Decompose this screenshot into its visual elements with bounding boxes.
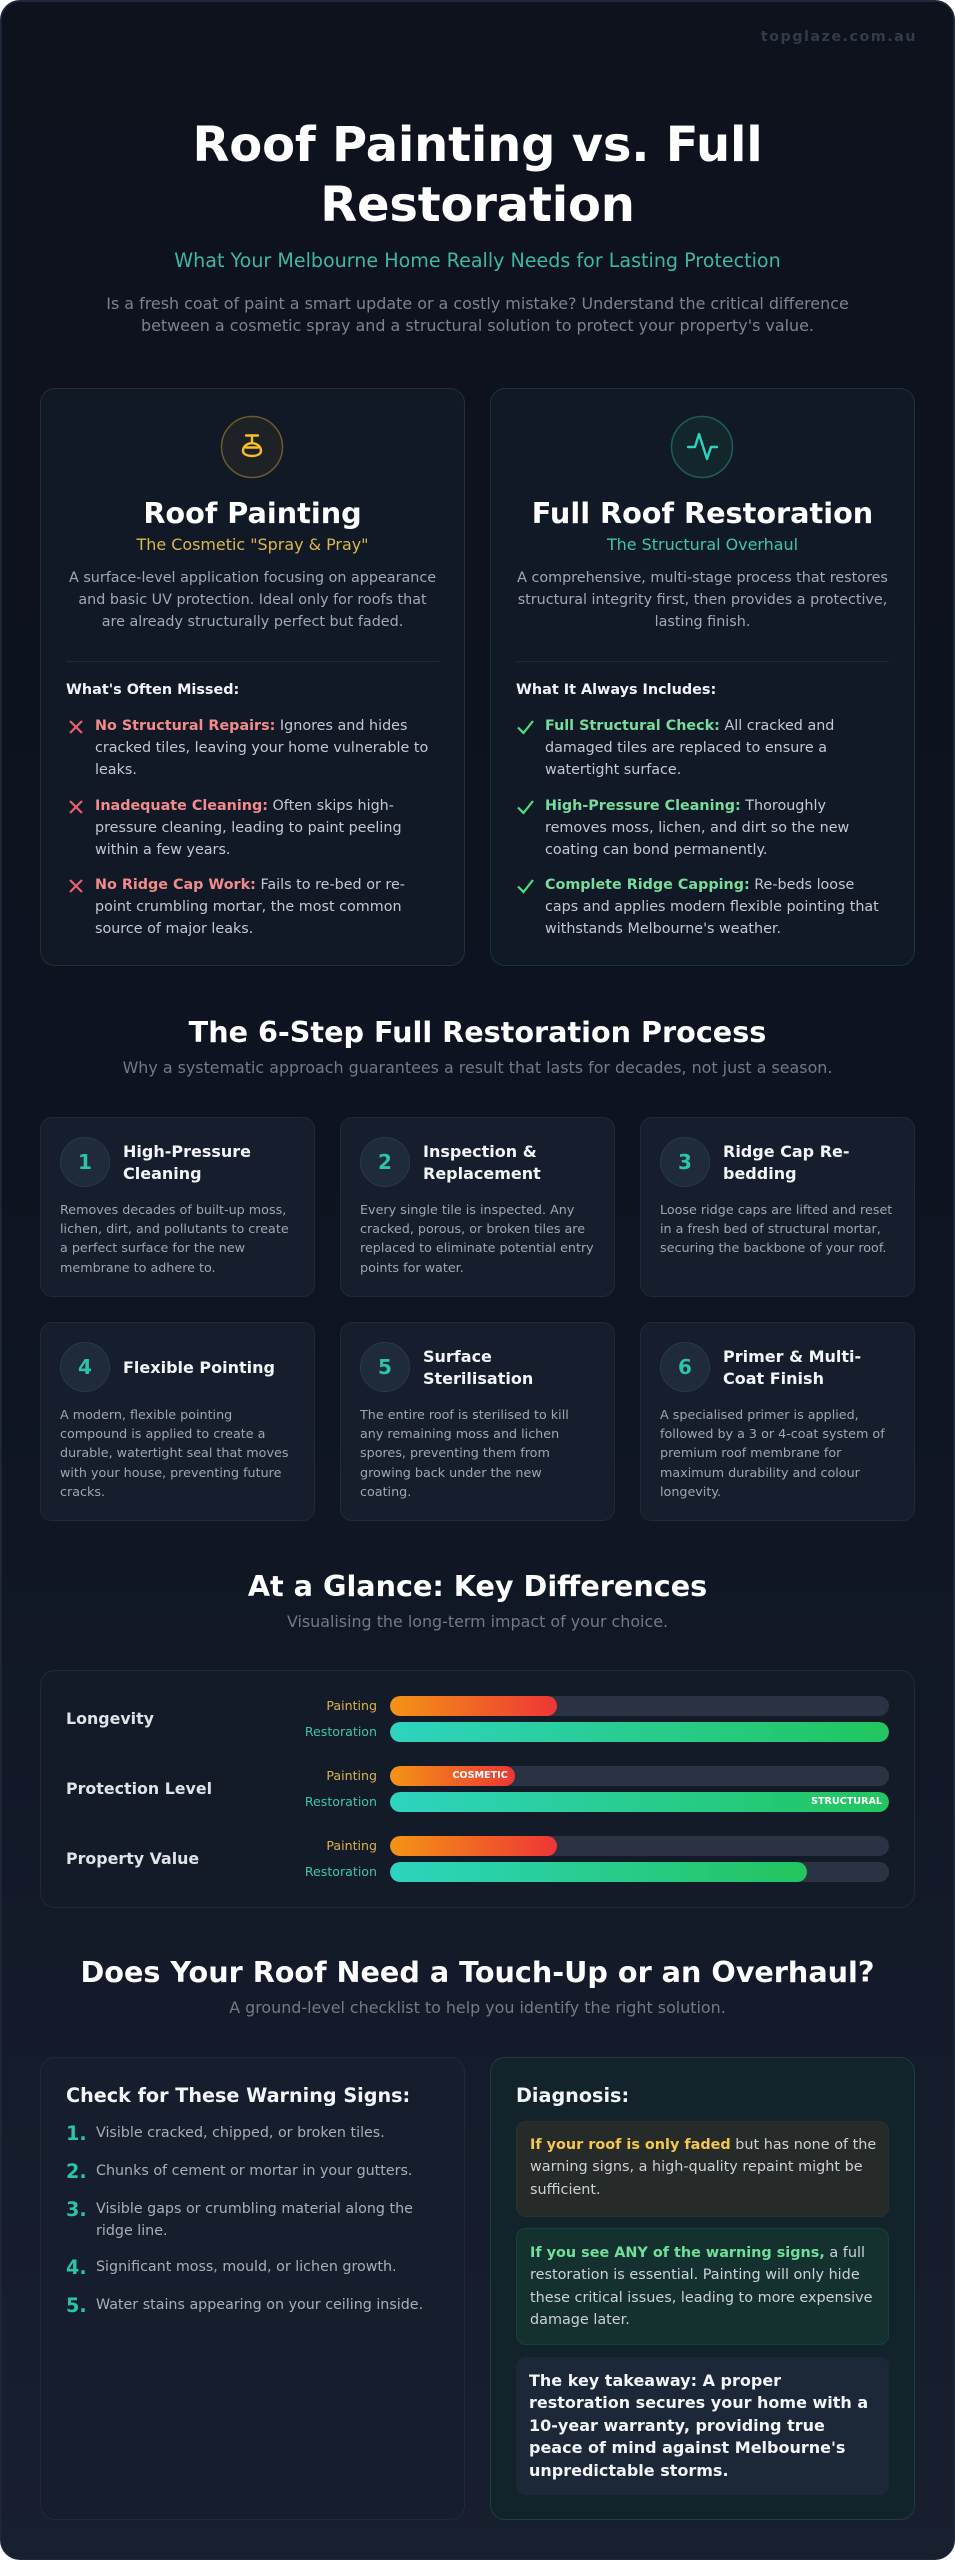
step title: High-Pressure — [123, 1142, 251, 1161]
tagline: The Cosmetic "Spray & Pray" — [136, 535, 368, 554]
description: structural integrity first, then provides a protective, — [518, 592, 887, 608]
panel: roof painting — [40, 388, 465, 966]
check icon — [517, 800, 534, 815]
description: are already structurally perfect but faded. — [102, 614, 403, 630]
heading: checklist: Does Your Roof Need a Touch-Up or an Overhaul? — [81, 1955, 874, 1989]
step 2 — [340, 1117, 615, 1297]
callout text: If you see ANY of the warning signs, a full — [530, 2245, 865, 2261]
heading: diagnosis: Diagnosis: — [516, 2084, 629, 2107]
step text: with your house, preventing future — [60, 1465, 281, 1480]
subheading: key differences: Visualising the long-term impact of your choice. — [287, 1612, 668, 1630]
item: high-pressure cleaning: removes moss, lichen, and dirt so the new — [545, 820, 849, 836]
label: restoration: Restoration — [305, 1794, 377, 1809]
step text: followed by a 3 or 4-coat system of — [660, 1426, 885, 1441]
step title: Cleaning — [123, 1164, 202, 1183]
item: no structural repairs — [95, 718, 428, 778]
item: complete ridge capping: caps and applies modern flexible pointing that — [545, 899, 879, 915]
step text — [60, 1202, 289, 1275]
step number: 2 — [378, 1150, 392, 1174]
step title — [423, 1347, 533, 1388]
warning numbers: 4. — [66, 2256, 87, 2279]
check icon — [517, 879, 534, 894]
step number: 1 — [78, 1150, 92, 1174]
heading: process: The 6-Step Full Restoration Process — [189, 1015, 766, 1049]
step title — [123, 1142, 251, 1183]
label: painting: Painting — [326, 1838, 377, 1853]
intro text: Is a fresh coat of paint a smart update or a costly mistake? Understand the critical difference — [106, 294, 849, 313]
warning 1: Visible cracked, chipped, or broken tiles. — [96, 2124, 385, 2140]
callout text: sufficient. — [530, 2182, 601, 2198]
step text: A modern, flexible pointing — [60, 1407, 232, 1422]
row: property value: Property Value — [66, 1849, 199, 1868]
step number: 4 — [78, 1355, 92, 1379]
step title: Surface — [423, 1347, 492, 1366]
item: no structural repairs: leaks. — [95, 762, 137, 778]
step title — [423, 1142, 541, 1183]
step title — [723, 1142, 850, 1183]
subtitle: What Your Melbourne Home Really Needs for Lasting Protection — [174, 249, 781, 272]
step text: cracked, porous, or broken tiles are — [360, 1221, 585, 1236]
bar: restoration protection: STRUCTURAL — [811, 1796, 882, 1807]
label: painting: Painting — [326, 1768, 377, 1783]
title: Roof Painting vs. Full — [193, 117, 762, 173]
heading: full roof restoration: Full Roof Restoration — [532, 496, 873, 530]
step title: Ridge Cap Re- — [723, 1142, 850, 1161]
step text — [360, 1407, 569, 1499]
step 6 — [640, 1322, 915, 1521]
step 3 — [640, 1117, 915, 1297]
step text: coating. — [360, 1484, 411, 1499]
step text: Loose ridge caps are lifted and reset — [660, 1202, 892, 1217]
warning 3 — [96, 2200, 413, 2239]
bar: painting protection: COSMETIC — [452, 1770, 508, 1781]
step title: bedding — [723, 1164, 797, 1183]
step text: growing back under the new — [360, 1465, 542, 1480]
item: no ridge cap work — [95, 877, 405, 937]
item: high-pressure cleaning: coating can bond permanently. — [545, 842, 768, 858]
step number: 6 — [678, 1355, 692, 1379]
step 4 — [40, 1322, 315, 1521]
bar: painting longevity — [390, 1696, 889, 1716]
step text — [660, 1202, 892, 1255]
list heading: What's Often Missed: — [66, 682, 239, 698]
label: painting: Painting — [326, 1698, 377, 1713]
item: no ridge cap work: No Ridge Cap Work: Fails to re-bed or re- — [95, 877, 405, 893]
item: complete ridge capping: withstands Melbourne's weather. — [545, 921, 781, 937]
step title: Coat Finish — [723, 1369, 824, 1388]
step text: cracks. — [60, 1484, 105, 1499]
heading: key differences: At a Glance: Key Differences — [248, 1569, 707, 1603]
bar: painting protection — [390, 1766, 889, 1786]
step number — [60, 1342, 110, 1392]
step text: any remaining moss and lichen — [360, 1426, 559, 1441]
step text: durable, watertight seal that moves — [60, 1445, 288, 1460]
step number — [660, 1342, 710, 1392]
item: no structural repairs: No Structural Repairs: Ignores and hides — [95, 718, 407, 734]
item: complete ridge capping — [545, 877, 879, 937]
warning numbers: 1. — [66, 2122, 87, 2145]
step text: longevity. — [660, 1484, 721, 1499]
warning 5: Water stains appearing on your ceiling inside. — [96, 2296, 423, 2312]
check icon — [517, 720, 534, 735]
item: full structural check: watertight surface. — [545, 762, 681, 778]
step text: premium roof membrane for — [660, 1445, 841, 1460]
item: no ridge cap work: source of major leaks. — [95, 921, 253, 937]
bar: restoration value — [390, 1862, 889, 1882]
cross icon — [69, 879, 83, 893]
cross icon — [69, 720, 83, 734]
callout text: warning signs, a high-quality repaint might be — [530, 2159, 863, 2175]
warning numbers: 3. — [66, 2198, 87, 2221]
step text: A specialised primer is applied, — [660, 1407, 859, 1422]
intro text: between a cosmetic spray and a structural solution to protect your property's value. — [141, 316, 814, 335]
warning numbers: 2. — [66, 2160, 87, 2183]
list heading: What It Always Includes: — [516, 682, 716, 698]
description: A surface-level application focusing on appearance — [69, 570, 436, 586]
warning 3: Visible gaps or crumbling material along the — [96, 2200, 413, 2216]
item: full structural check: Full Structural Check: All cracked and — [545, 718, 834, 734]
heading: warning signs: Check for These Warning Signs: — [66, 2084, 410, 2107]
description: A comprehensive, multi-stage process that restores — [517, 570, 888, 586]
step number — [60, 1137, 110, 1187]
icon: pulse — [670, 416, 734, 478]
step text: securing the backbone of your roof. — [660, 1240, 886, 1255]
callout text — [529, 2371, 868, 2480]
warning 4: Significant moss, mould, or lichen growth. — [96, 2258, 397, 2274]
row: protection level: Protection Level — [66, 1779, 212, 1798]
step text: points for water. — [360, 1260, 464, 1275]
step text — [360, 1202, 594, 1275]
subheading: checklist: A ground-level checklist to help you identify the right solution. — [229, 1998, 726, 2017]
description: lasting finish. — [655, 614, 750, 630]
step number: 5 — [378, 1355, 392, 1379]
step title: Flexible Pointing — [123, 1358, 275, 1377]
step text: Removes decades of built-up moss, — [60, 1202, 286, 1217]
step 5 — [340, 1322, 615, 1521]
step title: Replacement — [423, 1164, 541, 1183]
subheading: process: Why a systematic approach guarantees a result that lasts for decades, not just a season. — [123, 1058, 832, 1077]
item: full structural check: damaged tiles are replaced to ensure a — [545, 740, 827, 756]
step text: membrane to adhere to. — [60, 1260, 216, 1275]
description — [69, 570, 436, 630]
item: inadequate cleaning: pressure cleaning, leading to paint peeling — [95, 820, 402, 836]
title: Restoration — [320, 177, 635, 233]
label: restoration: Restoration — [305, 1724, 377, 1739]
callout text: The key takeaway: A proper — [529, 2371, 781, 2390]
callout text — [530, 2245, 873, 2328]
warning 2: Chunks of cement or mortar in your gutters. — [96, 2162, 412, 2178]
step text: in a fresh bed of structural mortar, — [660, 1221, 881, 1236]
bar chart panel — [40, 1670, 915, 1908]
step text: a perfect surface for the new — [60, 1240, 245, 1255]
step text — [60, 1407, 288, 1499]
item: full structural check — [545, 718, 834, 778]
step text: Every single tile is inspected. Any — [360, 1202, 574, 1217]
row: longevity: Longevity — [66, 1709, 154, 1728]
item: inadequate cleaning: Inadequate Cleaning: Often skips high- — [95, 798, 394, 814]
callout: warning signs seen — [516, 2228, 889, 2345]
step text — [660, 1407, 885, 1499]
step title — [723, 1347, 861, 1388]
cross icon — [69, 800, 83, 814]
step number — [360, 1342, 410, 1392]
callout text: these critical issues, leading to more expensive — [530, 2290, 873, 2306]
callout: key takeaway — [516, 2357, 889, 2495]
step text: lichen, dirt, and pollutants to create — [60, 1221, 289, 1236]
callout text: restoration is essential. Painting will only hide — [530, 2267, 860, 2283]
callout text: 10-year warranty, providing true — [529, 2416, 825, 2435]
step number — [360, 1137, 410, 1187]
item: complete ridge capping: Complete Ridge Capping: Re-beds loose — [545, 877, 854, 893]
step title: Primer & Multi- — [723, 1347, 861, 1366]
panel: full roof restoration — [490, 388, 915, 966]
item: inadequate cleaning — [95, 798, 402, 858]
callout text: peace of mind against Melbourne's — [529, 2438, 845, 2457]
bar: restoration protection — [390, 1792, 889, 1812]
callout text — [530, 2137, 876, 2198]
item: no structural repairs: cracked tiles, leaving your home vulnerable to — [95, 740, 428, 756]
warning 3: ridge line. — [96, 2223, 168, 2239]
step title: Inspection & — [423, 1142, 537, 1161]
step number — [660, 1137, 710, 1187]
callout text: damage later. — [530, 2312, 630, 2328]
description: and basic UV protection. Ideal only for roofs that — [78, 592, 427, 608]
panel: warning signs — [40, 2057, 465, 2520]
item: no ridge cap work: point crumbling mortar, the most common — [95, 899, 402, 915]
item: high-pressure cleaning — [545, 798, 849, 858]
warning numbers: 5. — [66, 2294, 87, 2317]
step number: 3 — [678, 1150, 692, 1174]
tagline: The Structural Overhaul — [607, 535, 798, 554]
step text: replaced to eliminate potential entry — [360, 1240, 594, 1255]
step 1 — [40, 1117, 315, 1297]
item: inadequate cleaning: within a few years. — [95, 842, 230, 858]
icon: paint — [220, 416, 284, 478]
step text: The entire roof is sterilised to kill — [360, 1407, 569, 1422]
bar: restoration longevity — [390, 1722, 889, 1742]
heading: roof painting: Roof Painting — [143, 496, 362, 530]
label: restoration: Restoration — [305, 1864, 377, 1879]
step text: compound is applied to create a — [60, 1426, 265, 1441]
callout text: restoration secures your home with a — [529, 2393, 868, 2412]
callout text: unpredictable storms. — [529, 2461, 729, 2480]
watermark: topglaze.com.au — [761, 29, 917, 45]
callout: faded — [516, 2121, 889, 2217]
callout text: If your roof is only faded but has none of the — [530, 2137, 876, 2153]
intro text — [106, 294, 849, 335]
title — [193, 117, 762, 233]
item: high-pressure cleaning: High-Pressure Cleaning: Thoroughly — [545, 798, 826, 814]
step title: Sterilisation — [423, 1369, 533, 1388]
description — [517, 570, 888, 630]
bar: painting value — [390, 1836, 889, 1856]
step text: spores, preventing them from — [360, 1445, 550, 1460]
panel: diagnosis — [490, 2057, 915, 2520]
step text: maximum durability and colour — [660, 1465, 860, 1480]
